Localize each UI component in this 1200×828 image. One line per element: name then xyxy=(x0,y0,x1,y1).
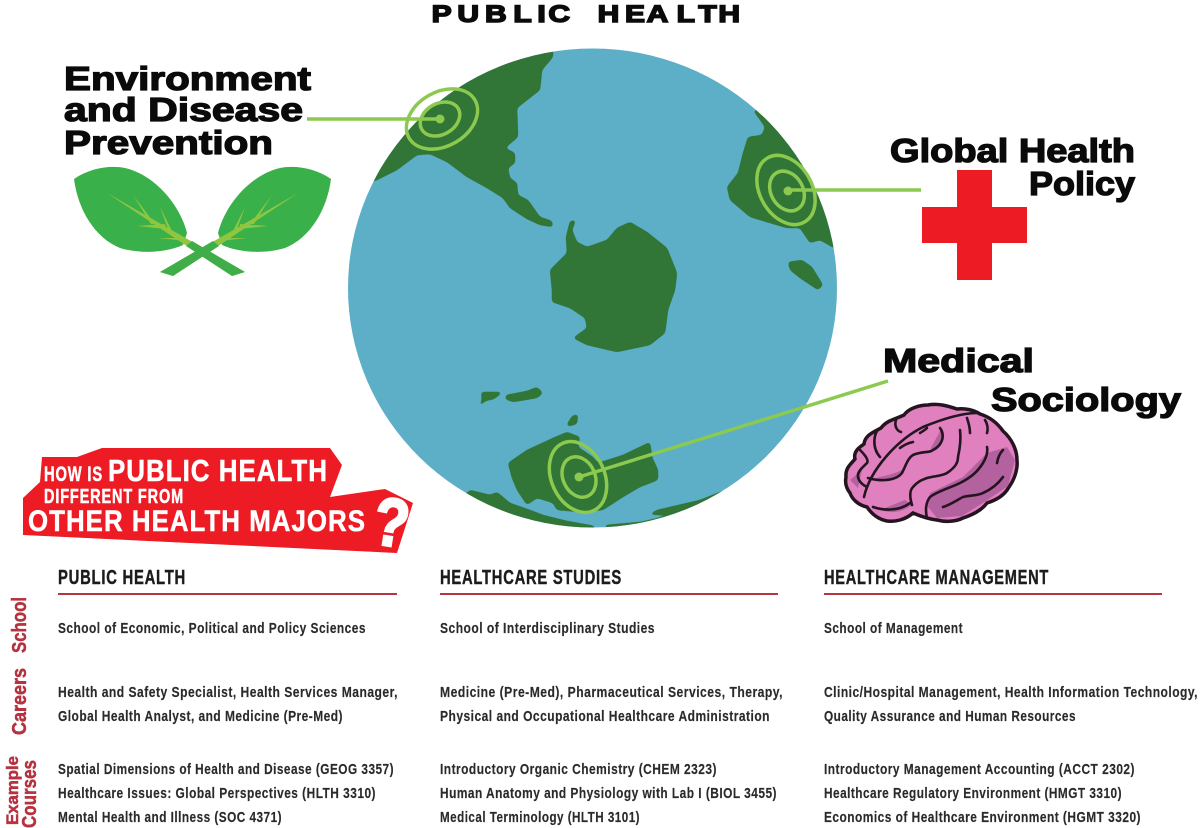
column: public health: Health and Safety Specialist, Health Services Manager, xyxy=(58,684,398,701)
side label: school: School xyxy=(9,597,31,653)
continent: upper right xyxy=(727,110,860,248)
column: public health: School of Economic, Political and Policy Sciences xyxy=(58,620,366,637)
column: healthcare studies: Introductory Organic Chemistry (CHEM 2323) xyxy=(440,761,717,778)
banner: ? xyxy=(368,483,416,563)
column: public health xyxy=(58,567,398,826)
heading: global health policy xyxy=(890,132,1136,202)
target: global health xyxy=(745,145,921,235)
column: public health: Mental Health and Illness (SOC 4371) xyxy=(58,809,282,826)
title: PUBLIC HEALTH xyxy=(432,0,740,27)
side label: example courses: Courses xyxy=(19,760,41,828)
banner: PUBLIC HEALTH xyxy=(108,453,328,488)
column: healthcare studies: School of Interdisciplinary Studies xyxy=(440,620,655,637)
continent: bottom rim xyxy=(466,490,723,528)
target: medical sociology xyxy=(538,381,888,522)
heading: medical sociology: Sociology xyxy=(991,381,1182,418)
heading: environment and disease prevention: Prevention xyxy=(64,124,273,161)
column: healthcare studies: HEALTHCARE STUDIES xyxy=(440,567,622,589)
icon: red cross xyxy=(922,170,1027,280)
target: environment xyxy=(307,77,488,161)
continent: lower xyxy=(508,432,658,512)
heading: global health policy: Global Health xyxy=(890,132,1135,169)
icon: leaves xyxy=(74,167,331,276)
heading: medical sociology: Medical xyxy=(883,342,1034,379)
column: public health: Spatial Dimensions of Health and Disease (GEOG 3357) xyxy=(58,761,394,778)
column: healthcare management: Healthcare Regulatory Environment (HMGT 3310) xyxy=(824,785,1122,802)
side label: careers: Careers xyxy=(9,668,31,735)
column: healthcare studies: Medicine (Pre-Med), Pharmaceutical Services, Therapy, xyxy=(440,684,783,701)
continent: upper left xyxy=(350,45,553,227)
banner: DIFFERENT FROM xyxy=(44,486,184,508)
heading: medical sociology xyxy=(883,342,1182,418)
island: right xyxy=(788,260,823,290)
column: public health: PUBLIC HEALTH xyxy=(58,567,186,589)
column: public health: Healthcare Issues: Global Perspectives (HLTH 3310) xyxy=(58,785,376,802)
heading: environment and disease prevention: and Disease xyxy=(64,91,303,128)
banner xyxy=(23,448,416,563)
banner: HOW IS xyxy=(44,463,103,486)
column: healthcare management: School of Management xyxy=(824,620,963,637)
column: healthcare management: HEALTHCARE MANAGEMENT xyxy=(824,567,1049,589)
icon: brain xyxy=(846,404,1017,521)
heading: global health policy: Policy xyxy=(1029,165,1136,202)
banner: OTHER HEALTH MAJORS xyxy=(28,505,366,538)
column: healthcare studies: Physical and Occupational Healthcare Administration xyxy=(440,708,770,725)
heading: environment and disease prevention xyxy=(64,60,311,161)
column: healthcare studies xyxy=(440,567,783,826)
side label: example courses: Example xyxy=(3,756,22,825)
heading: environment and disease prevention: Environment xyxy=(64,60,311,97)
column: healthcare management: Quality Assurance and Human Resources xyxy=(824,708,1076,725)
column: healthcare studies: Human Anatomy and Physiology with Lab I (BIOL 3455) xyxy=(440,785,777,802)
globe xyxy=(348,45,860,540)
islands: small centre xyxy=(478,387,578,426)
column: healthcare studies: Medical Terminology (HLTH 3101) xyxy=(440,809,640,826)
side label: example courses xyxy=(3,756,41,828)
column: healthcare management xyxy=(824,567,1198,826)
continent: centre xyxy=(550,220,677,352)
column: public health: Global Health Analyst, and Medicine (Pre-Med) xyxy=(58,708,343,725)
